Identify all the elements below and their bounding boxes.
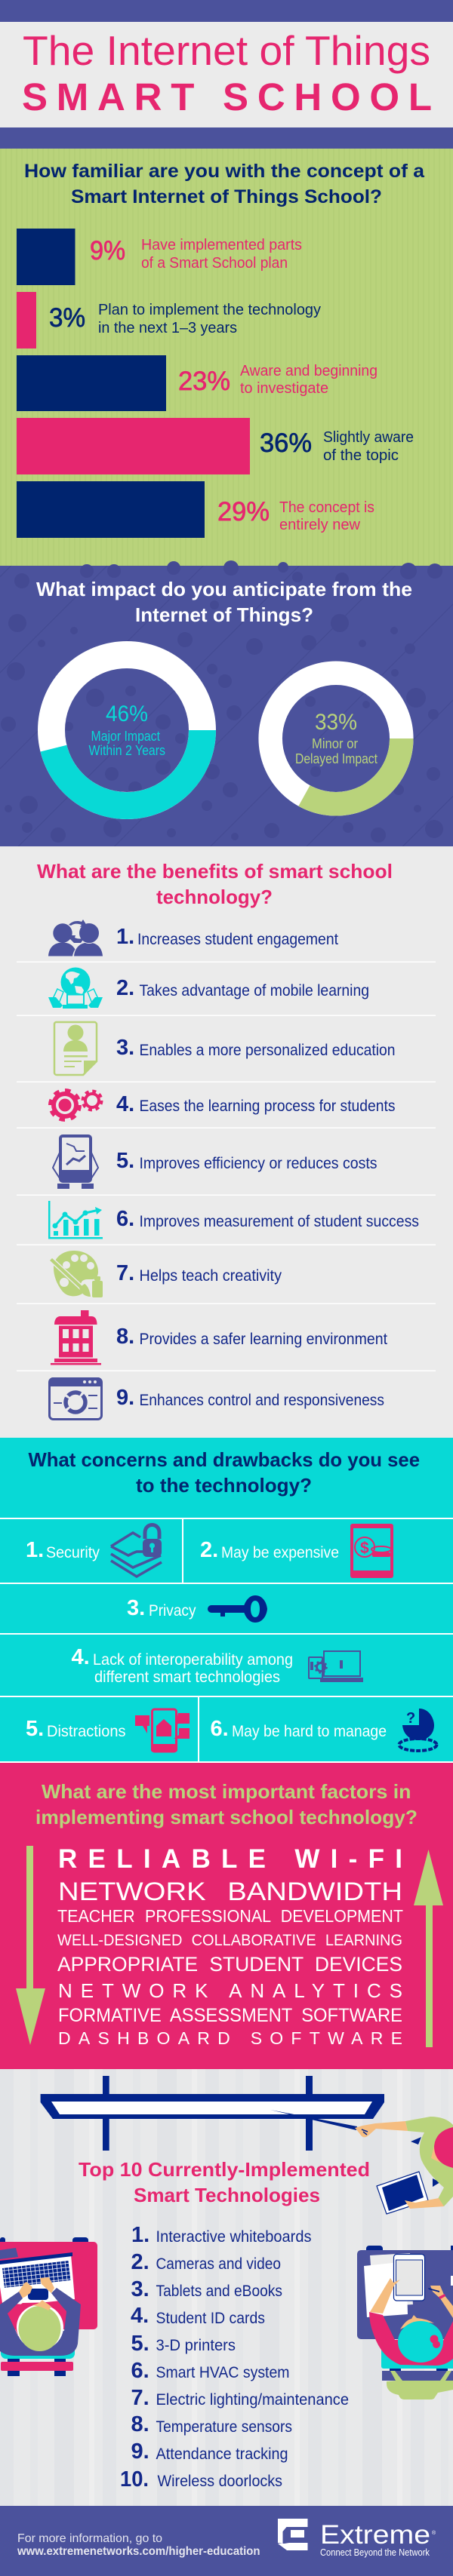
benefit 7: Helps teach creativity bbox=[139, 1267, 282, 1285]
bar row 23%: to investigate bbox=[240, 380, 328, 397]
footer link text bbox=[17, 2532, 260, 2558]
panel: important factors bbox=[0, 1763, 453, 2069]
bar row 36% bbox=[17, 418, 414, 474]
illustration: student with tablet bbox=[357, 2246, 453, 2399]
ranked list: 3. bbox=[131, 2277, 149, 2301]
ranked list: 4. bbox=[131, 2304, 149, 2328]
icon: palette bbox=[49, 1251, 103, 1297]
bar row 3%: Plan to implement the technology bbox=[98, 302, 321, 318]
bar row 3%: in the next 1–3 years bbox=[98, 320, 237, 336]
ranked list: 3-D printers bbox=[156, 2337, 236, 2354]
footer link text: www.extremenetworks.com/higher-education bbox=[17, 2545, 260, 2558]
benefit 3 bbox=[116, 1036, 396, 1060]
concern 6: hard to manage: May be hard to manage bbox=[232, 1723, 387, 1740]
concern 4: interoperability: 4. bbox=[71, 1645, 90, 1669]
heading: familiarity bbox=[24, 161, 425, 207]
benefit 6: Improves measurement of student success bbox=[139, 1213, 419, 1230]
concern 5: distractions: Distractions bbox=[47, 1723, 125, 1740]
ranked list: 5. bbox=[131, 2332, 149, 2356]
heading: familiarity: How familiar are you with the concept of a bbox=[24, 161, 425, 182]
concern 5: distractions: 5. bbox=[26, 1717, 44, 1741]
benefit 5 bbox=[116, 1149, 378, 1173]
benefit 2 bbox=[116, 976, 369, 1000]
logo: Extreme: ® bbox=[432, 2530, 436, 2536]
bar row 36%: Slightly aware bbox=[323, 429, 414, 446]
benefit 6 bbox=[116, 1207, 419, 1231]
concern 1: security bbox=[26, 1538, 100, 1562]
bar row 29%: 29% bbox=[217, 497, 270, 527]
panel: title header bbox=[0, 0, 453, 149]
bar row 9%: Have implemented parts bbox=[141, 237, 302, 253]
benefit 7 bbox=[116, 1261, 282, 1285]
ranked list: Cameras and video bbox=[156, 2255, 281, 2273]
benefit 1 bbox=[116, 925, 338, 949]
ranked factors word stack: NETWORK BANDWIDTH bbox=[58, 1878, 402, 1906]
benefit 4: 4. bbox=[116, 1092, 134, 1116]
footer link text: For more information, go to bbox=[17, 2532, 162, 2545]
logo: Extreme: Connect Beyond the Network bbox=[320, 2547, 430, 2558]
concern 6: hard to manage bbox=[210, 1717, 387, 1741]
concern 2: expensive: 2. bbox=[200, 1538, 218, 1562]
benefit 9: 9. bbox=[116, 1386, 134, 1410]
donut chart 46%: Major Impact bbox=[91, 729, 160, 744]
icon: tablet with dollar bbox=[350, 1524, 393, 1578]
bar row 29%: entirely new bbox=[279, 517, 361, 533]
heading: concerns bbox=[29, 1448, 420, 1497]
donut chart 46%: Within 2 Years bbox=[89, 743, 165, 758]
icon: key bbox=[208, 1595, 267, 1623]
heading: benefits bbox=[37, 860, 393, 908]
benefit 8 bbox=[116, 1325, 387, 1349]
ranked factors word stack: NETWORK ANALYTICS bbox=[58, 1979, 402, 2002]
concern 1: security: 1. bbox=[26, 1538, 44, 1562]
icon: phone with alerts bbox=[135, 1709, 190, 1752]
bar row 23% bbox=[17, 355, 378, 411]
benefit 1: 1. bbox=[116, 925, 134, 949]
icon: laptop and phone bbox=[309, 1651, 362, 1681]
benefit 1: Increases student engagement bbox=[137, 931, 338, 948]
benefit 5: Improves efficiency or reduces costs bbox=[139, 1155, 378, 1172]
ranked list: 1. bbox=[131, 2223, 149, 2247]
benefit 9: Enhances control and responsiveness bbox=[139, 1392, 384, 1409]
benefit 6: 6. bbox=[116, 1207, 134, 1231]
heading: benefits: What are the benefits of smart school bbox=[37, 860, 393, 883]
bar row 9% bbox=[17, 229, 302, 285]
icon: tablet with dollar: $ bbox=[360, 1540, 369, 1557]
ranked list: Smart HVAC system bbox=[156, 2364, 290, 2381]
ranked factors word stack: FORMATIVE ASSESSMENT SOFTWARE bbox=[58, 2005, 402, 2026]
panel: top 10 technologies bbox=[0, 2069, 453, 2506]
bar row 23%: Aware and beginning bbox=[240, 363, 378, 379]
concern 2: expensive: May be expensive bbox=[221, 1544, 339, 1561]
panel: benefits bbox=[0, 846, 453, 1438]
heading: factors bbox=[35, 1780, 418, 1828]
heading: impact: What impact do you anticipate from the bbox=[36, 578, 412, 600]
ranked factors word stack: APPROPRIATE STUDENT DEVICES bbox=[57, 1953, 402, 1976]
heading: impact bbox=[36, 578, 412, 626]
donut chart 33%: Minor or bbox=[312, 736, 358, 751]
benefit 4 bbox=[116, 1092, 396, 1116]
ranked list: Student ID cards bbox=[156, 2310, 265, 2327]
donut chart 33%: 33% bbox=[315, 710, 357, 735]
benefit 8: 8. bbox=[116, 1325, 134, 1349]
heading: familiarity: Smart Internet of Things School? bbox=[71, 186, 382, 207]
heading: top 10 bbox=[79, 2158, 370, 2206]
illustration: teacher with pointer and tablet bbox=[270, 2110, 453, 2214]
ranked factors word stack: RELIABLE WI-FI bbox=[58, 1844, 402, 1874]
benefit 5: 5. bbox=[116, 1149, 134, 1173]
ranked factors word stack: DASHBOARD SOFTWARE bbox=[58, 2028, 402, 2048]
heading: benefits: technology? bbox=[156, 886, 273, 908]
benefit 7: 7. bbox=[116, 1261, 134, 1285]
bar row 9%: 9% bbox=[90, 236, 125, 266]
bar row 36%: 36% bbox=[260, 428, 312, 458]
bar row 3%: 3% bbox=[49, 303, 85, 333]
icon: dashboard window bbox=[49, 1377, 102, 1420]
logo: Extreme bbox=[278, 2519, 436, 2558]
arrow: up bbox=[414, 1850, 443, 2047]
bar row 23%: 23% bbox=[178, 367, 230, 396]
ranked list: 10. bbox=[120, 2467, 149, 2492]
ranked list: Attendance tracking bbox=[156, 2446, 288, 2463]
icon: pie and question mark bbox=[399, 1709, 436, 1751]
title: Smart School: SMART SCHOOL bbox=[22, 75, 432, 118]
ranked list: 8. bbox=[131, 2412, 149, 2436]
heading: factors: What are the most important factors in bbox=[42, 1780, 411, 1803]
benefit 8: Provides a safer learning environment bbox=[139, 1331, 387, 1348]
bar row 3% bbox=[17, 292, 321, 348]
illustration: student at laptop bbox=[0, 2237, 97, 2376]
icon: lock on layers bbox=[111, 1525, 162, 1577]
bar row 9%: of a Smart School plan bbox=[141, 255, 288, 272]
title: The Internet of Things: The Internet of Things bbox=[23, 27, 430, 74]
concern 6: hard to manage: 6. bbox=[210, 1717, 229, 1741]
benefit 4: Eases the learning process for students bbox=[139, 1098, 396, 1115]
icon: growth chart bbox=[48, 1201, 103, 1239]
benefit 2: 2. bbox=[116, 976, 134, 1000]
donut chart 46%: 46% bbox=[106, 702, 148, 726]
donut chart 33%: Delayed Impact bbox=[295, 751, 378, 766]
ranked list: 6. bbox=[131, 2359, 149, 2383]
icon: pie and question mark: ? bbox=[406, 1710, 415, 1727]
logo: Extreme: Extreme bbox=[320, 2520, 430, 2550]
icon: gears bbox=[50, 1091, 101, 1119]
concern 4: interoperability: Lack of interoperability among bbox=[93, 1651, 293, 1669]
bar row 29% bbox=[17, 481, 374, 538]
icon: school building bbox=[51, 1310, 101, 1365]
donut chart 46% bbox=[41, 655, 216, 819]
donut chart 33% bbox=[270, 673, 414, 816]
benefit 9 bbox=[116, 1386, 384, 1410]
ranked list: Tablets and eBooks bbox=[156, 2283, 282, 2300]
concern 2: expensive bbox=[200, 1538, 339, 1562]
panel: concerns and drawbacks bbox=[0, 1438, 453, 1763]
panel: footer bbox=[0, 2506, 453, 2576]
ranked list: Electric lighting/maintenance bbox=[156, 2391, 349, 2409]
concern 4: interoperability bbox=[71, 1645, 293, 1686]
ranked list: Interactive whiteboards bbox=[156, 2228, 311, 2246]
ranked list: 9. bbox=[131, 2439, 149, 2464]
icon: globe and laptops bbox=[48, 967, 103, 1009]
ranked factors word stack: WELL-DESIGNED COLLABORATIVE LEARNING bbox=[57, 1932, 402, 1949]
bar row 36%: of the topic bbox=[323, 447, 399, 464]
benefit 3: Enables a more personalized education bbox=[139, 1042, 396, 1059]
concern 3: privacy: 3. bbox=[127, 1596, 145, 1620]
ranked list bbox=[120, 2223, 349, 2492]
arrow: down bbox=[16, 1846, 45, 2045]
ranked list: Temperature sensors bbox=[156, 2418, 292, 2436]
concern 3: privacy bbox=[127, 1596, 196, 1620]
heading: concerns: to the technology? bbox=[136, 1474, 312, 1497]
ranked list: 2. bbox=[131, 2250, 149, 2274]
heading: impact: Internet of Things? bbox=[135, 603, 313, 626]
illustration: smart whiteboard bbox=[41, 2076, 384, 2151]
bar row 29%: The concept is bbox=[279, 499, 374, 516]
ranked list: Wireless doorlocks bbox=[157, 2473, 282, 2490]
panel: familiarity bar chart bbox=[0, 149, 453, 566]
icon: phone in hands bbox=[53, 1136, 98, 1189]
concern 4: interoperability: different smart technologies bbox=[94, 1669, 280, 1686]
concern 5: distractions bbox=[26, 1717, 125, 1741]
ranked factors word stack bbox=[57, 1844, 403, 2048]
icon: student document bbox=[54, 1022, 97, 1076]
panel: anticipated impact bbox=[0, 560, 453, 846]
benefit 3: 3. bbox=[116, 1036, 134, 1060]
heading: concerns: What concerns and drawbacks do you see bbox=[29, 1448, 420, 1471]
icon: two people bbox=[48, 920, 103, 956]
benefit 2: Takes advantage of mobile learning bbox=[139, 982, 369, 999]
ranked factors word stack: TEACHER PROFESSIONAL DEVELOPMENT bbox=[57, 1906, 403, 1926]
concern 3: privacy: Privacy bbox=[149, 1602, 196, 1620]
ranked list: 7. bbox=[131, 2386, 149, 2410]
heading: top 10: Smart Technologies bbox=[134, 2184, 320, 2206]
concern 1: security: Security bbox=[46, 1544, 100, 1561]
heading: factors: implementing smart school technology? bbox=[35, 1806, 418, 1828]
heading: top 10: Top 10 Currently-Implemented bbox=[79, 2158, 370, 2181]
